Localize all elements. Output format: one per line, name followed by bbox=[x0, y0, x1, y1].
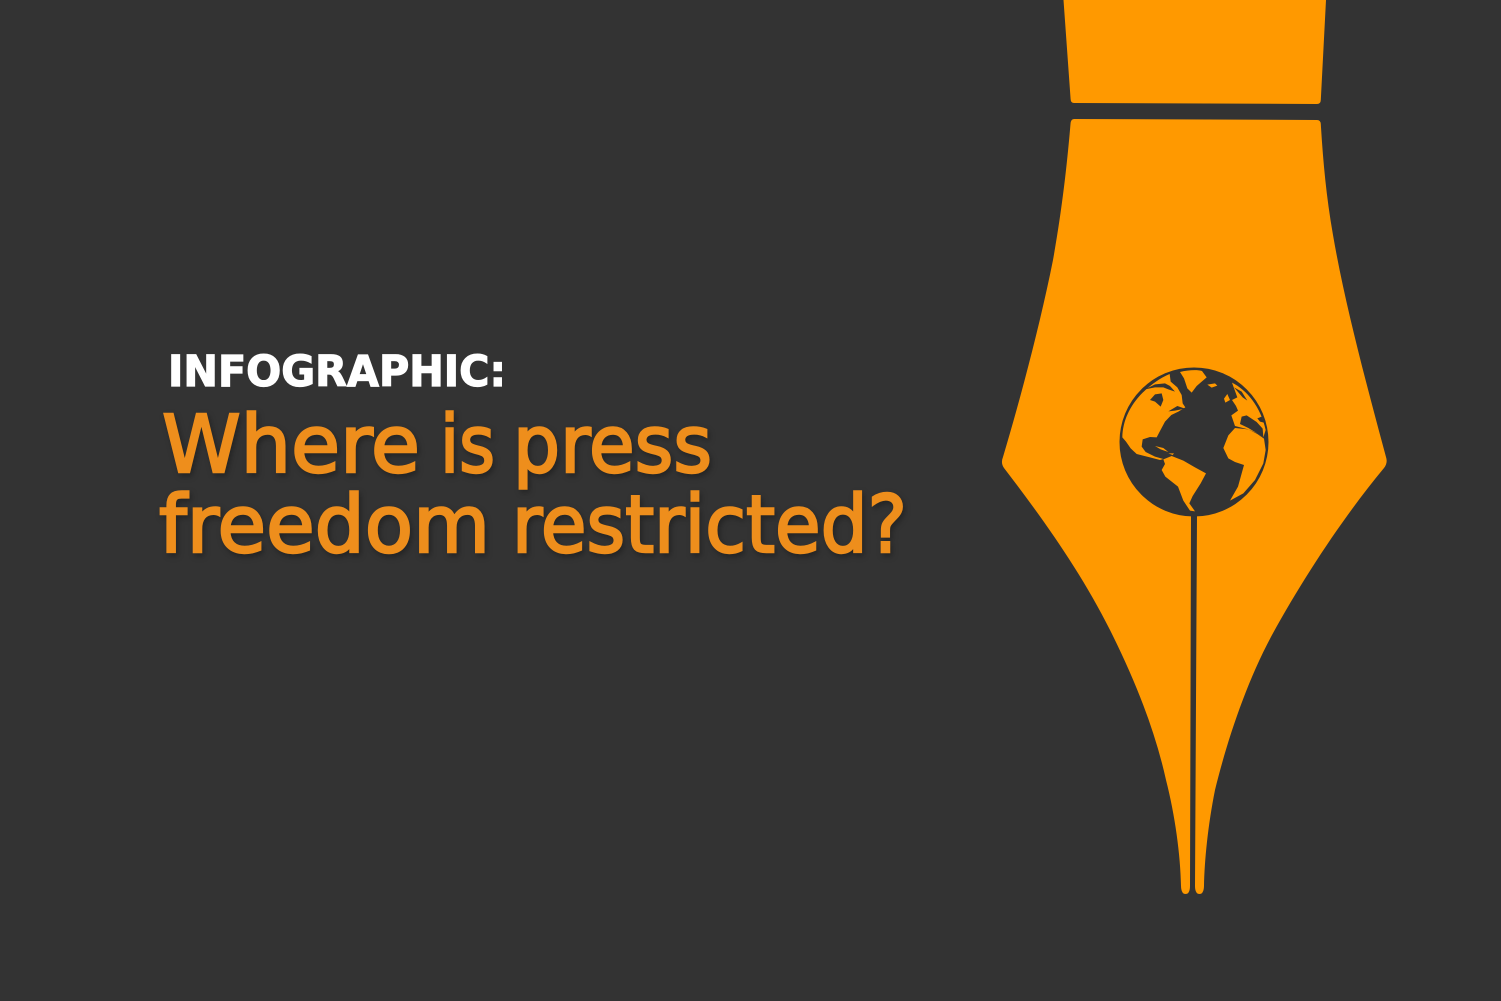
Iceland bbox=[1207, 383, 1217, 388]
Greenland bbox=[1180, 370, 1207, 393]
Caribbean islands bbox=[1155, 446, 1174, 455]
icon: fountain pen bbox=[1002, 0, 1387, 894]
Britain bbox=[1224, 394, 1230, 403]
Hudson Bay and Arctic channels bbox=[1145, 383, 1185, 411]
Africa bbox=[1223, 428, 1266, 501]
pen collar bbox=[1064, 0, 1326, 104]
North America bbox=[1122, 374, 1185, 460]
kicker: INFOGRAPHIC: INFOGRAPHIC: bbox=[168, 348, 506, 397]
heading: Where bbox=[162, 399, 420, 491]
heading: restricted? bbox=[512, 479, 907, 571]
heading: freedom bbox=[159, 479, 490, 571]
heading bbox=[159, 399, 907, 571]
heading: is bbox=[440, 399, 495, 491]
pen nib bbox=[1002, 119, 1387, 894]
Scandinavian channels and Mediterranean bbox=[1234, 387, 1264, 437]
title block bbox=[159, 348, 907, 571]
South America bbox=[1162, 456, 1206, 511]
icon: globe bbox=[1120, 368, 1268, 516]
heading: press bbox=[513, 399, 712, 491]
Europe bbox=[1231, 383, 1266, 437]
